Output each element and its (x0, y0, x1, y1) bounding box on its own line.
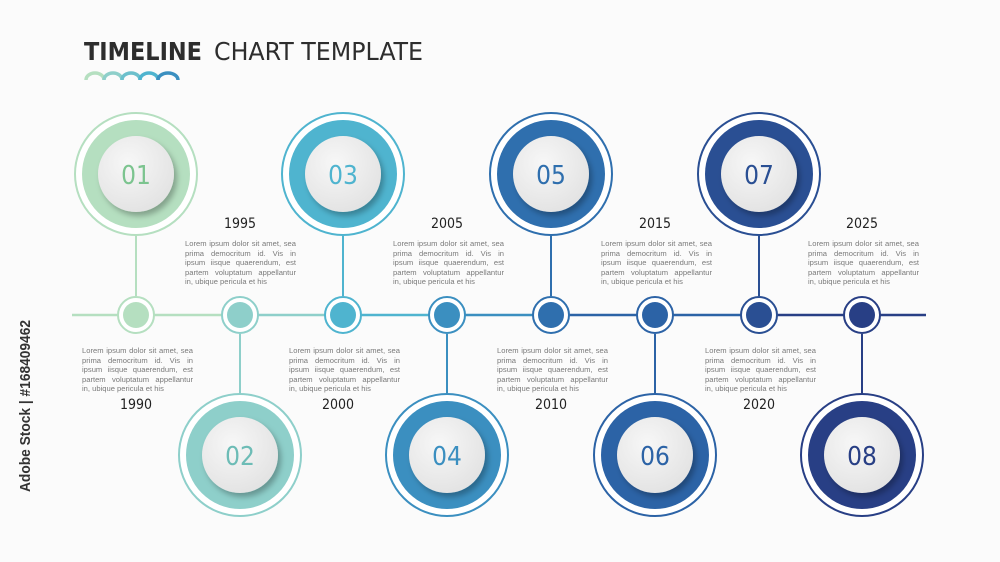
text 2015: Lorem ipsum dolor sit amet, sea prima democritum id. Vis in ipsum iisque quaerendum, est partem voluptatum appellantur in, ubique pericula et his (601, 239, 712, 286)
timeline axis (72, 314, 926, 316)
milestone 08: 08 (847, 442, 877, 472)
title: TIMELINE (84, 37, 202, 66)
text 2000: Lorem ipsum dolor sit amet, sea prima democritum id. Vis in ipsum iisque quaerendum, est partem voluptatum appellantur in, ubique pericula et his (289, 346, 400, 393)
milestone 05 (490, 113, 612, 333)
text 1990: Lorem ipsum dolor sit amet, sea prima democritum id. Vis in ipsum iisque quaerendum, est partem voluptatum appellantur in, ubique pericula et his (82, 346, 193, 393)
text 2005: Lorem ipsum dolor sit amet, sea prima democritum id. Vis in ipsum iisque quaerendum, est partem voluptatum appellantur in, ubique pericula et his (393, 239, 504, 286)
milestone 04: 04 (432, 442, 462, 472)
title wave decoration (86, 73, 178, 80)
milestone 03 (282, 113, 404, 333)
milestone 03: 03 (328, 161, 358, 191)
title: CHART TEMPLATE (214, 37, 423, 66)
watermark id vertical: Adobe Stock | #168409462 (17, 320, 34, 492)
milestone 07 (698, 113, 820, 333)
text 1995: Lorem ipsum dolor sit amet, sea prima democritum id. Vis in ipsum iisque quaerendum, est partem voluptatum appellantur in, ubique pericula et his (185, 239, 296, 286)
milestone 07: 07 (744, 161, 774, 191)
milestone 04 (386, 297, 508, 516)
text 2010: Lorem ipsum dolor sit amet, sea prima democritum id. Vis in ipsum iisque quaerendum, est partem voluptatum appellantur in, ubique pericula et his (497, 346, 608, 393)
milestone 02 (179, 297, 301, 516)
year 2025: 2025 (846, 216, 878, 232)
year 2010: 2010 (535, 397, 567, 413)
year 2005: 2005 (431, 216, 463, 232)
milestone 01: 01 (121, 161, 151, 191)
year 1995: 1995 (224, 216, 256, 232)
year 2000: 2000 (322, 397, 354, 413)
milestone 08 (801, 297, 923, 516)
year 2015: 2015 (639, 216, 671, 232)
year 2020: 2020 (743, 397, 775, 413)
milestone 02: 02 (225, 442, 255, 472)
milestone 06: 06 (640, 442, 670, 472)
milestone 06 (594, 297, 716, 516)
milestone 05: 05 (536, 161, 566, 191)
year 1990: 1990 (120, 397, 152, 413)
milestone 01 (75, 113, 197, 333)
text 2025: Lorem ipsum dolor sit amet, sea prima democritum id. Vis in ipsum iisque quaerendum, est partem voluptatum appellantur in, ubique pericula et his (808, 239, 919, 286)
text 2020: Lorem ipsum dolor sit amet, sea prima democritum id. Vis in ipsum iisque quaerendum, est partem voluptatum appellantur in, ubique pericula et his (705, 346, 816, 393)
title (84, 37, 423, 66)
